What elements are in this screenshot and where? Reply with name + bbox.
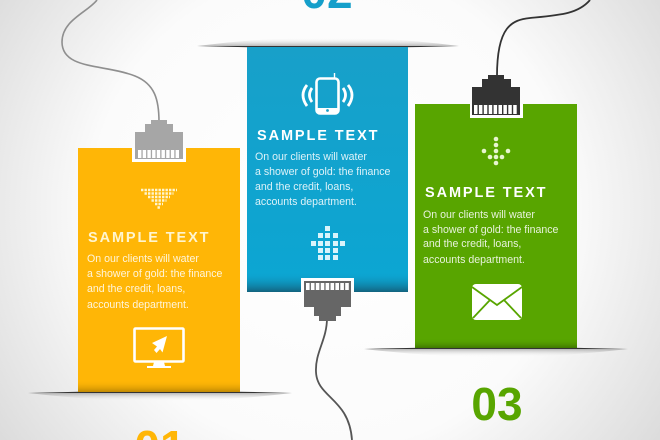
icon: dotted down triangle xyxy=(141,190,177,208)
text: orange card body: accounts department. xyxy=(87,299,189,311)
connector: gray plug xyxy=(132,120,186,162)
text: blue card body: and the credit, loans, xyxy=(255,181,353,193)
panel: orange card xyxy=(78,120,240,392)
shadow under green card xyxy=(364,347,628,357)
text: blue card body: accounts department. xyxy=(255,196,357,208)
text: orange card body: and the credit, loans, xyxy=(87,283,185,295)
shadow under orange card xyxy=(28,391,292,401)
shadow above blue card xyxy=(197,38,459,48)
cable: dark to green card xyxy=(497,0,590,76)
heading: blue card: SAMPLE TEXT xyxy=(257,128,379,144)
text: green card body: and the credit, loans, xyxy=(423,238,521,250)
icon: dotted up arrow xyxy=(311,226,345,260)
panel: blue card xyxy=(247,47,408,321)
connector: dark gray plug xyxy=(301,278,354,321)
cable: gray to orange card xyxy=(62,0,159,122)
text: blue card body: On our clients will water xyxy=(255,151,367,163)
heading: orange card: SAMPLE TEXT xyxy=(88,230,210,246)
text: orange card body: On our clients will water xyxy=(87,253,199,265)
icon: dotted down arrow xyxy=(482,137,510,165)
icon: monitor with cursor xyxy=(134,328,184,368)
icon: vibrating phone xyxy=(303,73,352,114)
panel: green card xyxy=(415,75,577,348)
text: green card body: accounts department. xyxy=(423,254,525,266)
text: orange card body: a shower of gold: the finance xyxy=(87,268,223,280)
connector: black plug xyxy=(470,75,523,118)
icon: envelope xyxy=(472,284,522,320)
text: green card body: a shower of gold: the finance xyxy=(423,224,559,236)
heading: green card: SAMPLE TEXT xyxy=(425,185,547,201)
number 03: 03 xyxy=(471,378,523,430)
text: green card body: On our clients will water xyxy=(423,209,535,221)
text: blue card body: a shower of gold: the finance xyxy=(255,166,391,178)
cable: blue card connector downward xyxy=(316,318,352,440)
